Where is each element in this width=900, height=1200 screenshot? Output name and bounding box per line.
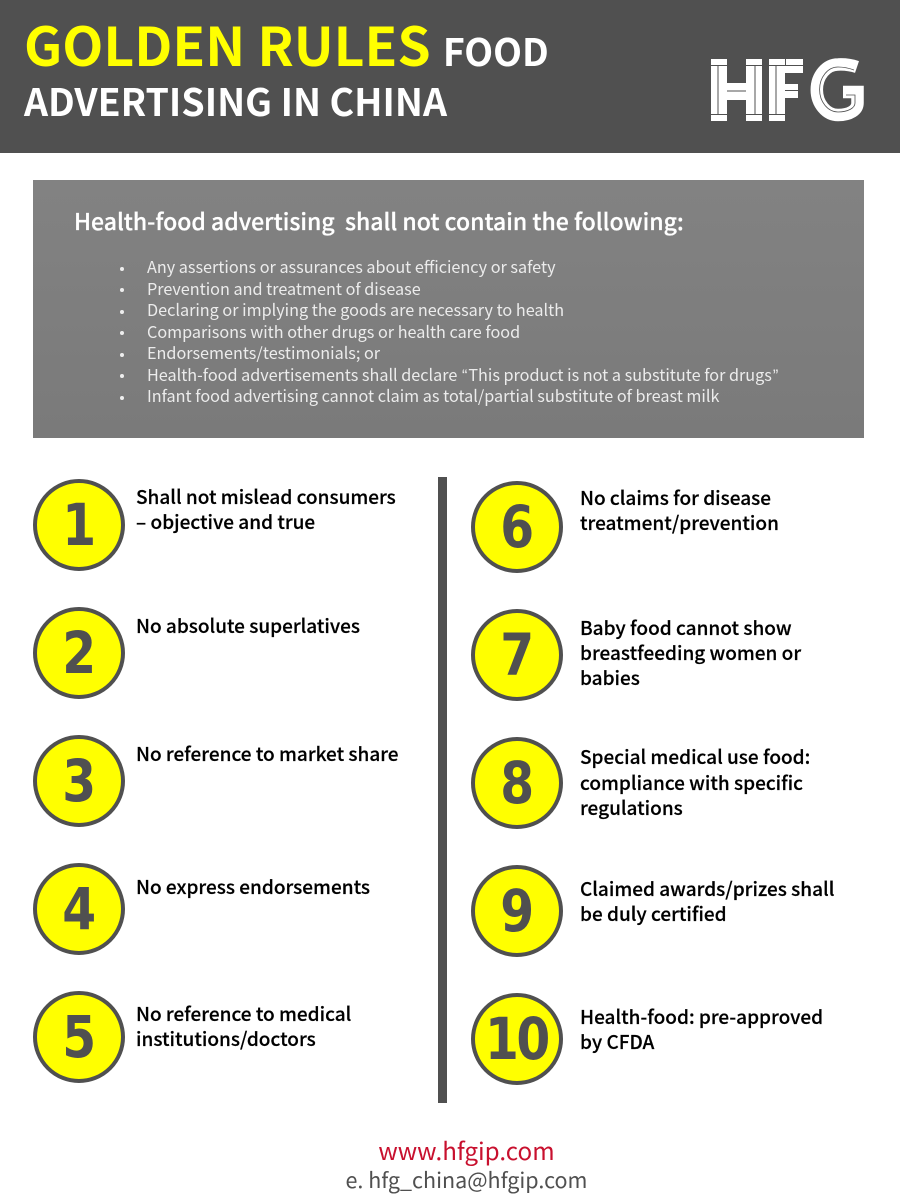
rule 3 text: No reference to market share — [136, 740, 399, 767]
rule 2 text: No absolute superlatives — [136, 612, 360, 639]
badge 5 — [33, 991, 125, 1083]
bullet list: Declaring or implying the goods are necessary to health — [147, 297, 564, 321]
bullet list: Infant food advertising cannot claim as total/partial substitute of breast milk — [147, 383, 719, 407]
bullet list: Comparisons with other drugs or health care food — [147, 319, 520, 343]
badge 8: 8 — [500, 749, 534, 817]
title line 1: GOLDEN RULES FOOD — [24, 5, 549, 82]
badge 3 — [33, 735, 125, 827]
rule 1 text — [136, 483, 396, 535]
rule 6 text — [580, 484, 779, 536]
title line 2: ADVERTISING IN CHINA — [24, 72, 447, 127]
rule 8 text: regulations — [580, 794, 683, 821]
rule 5 text: institutions/doctors — [136, 1025, 316, 1052]
rule 8 text: compliance with specific — [580, 768, 803, 796]
badge 7: 7 — [500, 621, 534, 689]
rule 8 text — [580, 743, 810, 821]
rule 10 text: by CFDA — [580, 1028, 654, 1055]
bullet list: Endorsements/testimonials; or — [147, 340, 380, 364]
rule 7 text: breastfeeding women or — [580, 639, 801, 666]
panel heading: Health-food advertising shall not contain the following: — [74, 203, 684, 237]
bullet list: Health-food advertisements shall declare “This product is not a substitute for drugs” — [147, 362, 778, 386]
logo: HFG — [711, 58, 864, 122]
badge 10: 10 — [485, 1005, 547, 1073]
badge 3: 3 — [62, 747, 96, 815]
rule 8 text: Special medical use food: — [580, 743, 810, 770]
rule 1 text: Shall not mislead consumers — [136, 483, 396, 510]
rule 1 text: – objective and true — [136, 508, 315, 535]
rule 9 text — [580, 875, 834, 927]
badge 7 — [471, 609, 563, 701]
rule 5 text: No reference to medical — [136, 1000, 351, 1027]
bullet list: Prevention and treatment of disease — [147, 276, 421, 300]
rule 7 text: Baby food cannot show — [580, 614, 792, 641]
rule 10 text — [580, 1003, 823, 1055]
rule 10 text: Health-food: pre-approved — [580, 1003, 823, 1030]
badge 2 — [33, 607, 125, 699]
website: www.hfgip.com — [378, 1132, 555, 1167]
rule 4 text: No express endorsements — [136, 873, 370, 900]
rule 7 text — [580, 614, 802, 691]
badge 10 — [471, 993, 563, 1085]
badge 6 — [471, 481, 563, 573]
center divider — [438, 477, 447, 1103]
email: e. hfg_china@hfgip.com — [346, 1164, 587, 1195]
rule 6 text: treatment/prevention — [580, 509, 779, 536]
badge 4: 4 — [62, 875, 96, 943]
badge 9: 9 — [500, 877, 534, 945]
bullet list: Any assertions or assurances about efficiency or safety — [147, 254, 556, 278]
bullet list — [120, 254, 778, 407]
badge 5: 5 — [62, 1003, 96, 1071]
badge 8 — [471, 737, 563, 829]
rule 5 text — [136, 1000, 351, 1052]
badge 1: 1 — [62, 491, 96, 559]
badge 9 — [471, 865, 563, 957]
rule 7 text: babies — [580, 664, 640, 691]
badge 2: 2 — [62, 619, 96, 687]
badge 1 — [33, 479, 125, 571]
rule 9 text: Claimed awards/prizes shall — [580, 875, 834, 902]
badge 4 — [33, 863, 125, 955]
badge 6: 6 — [500, 493, 534, 561]
header band — [0, 0, 900, 153]
panel: health-food advertising restrictions — [33, 180, 864, 438]
rule 9 text: be duly certified — [580, 900, 727, 927]
rule 6 text: No claims for disease — [580, 484, 771, 511]
